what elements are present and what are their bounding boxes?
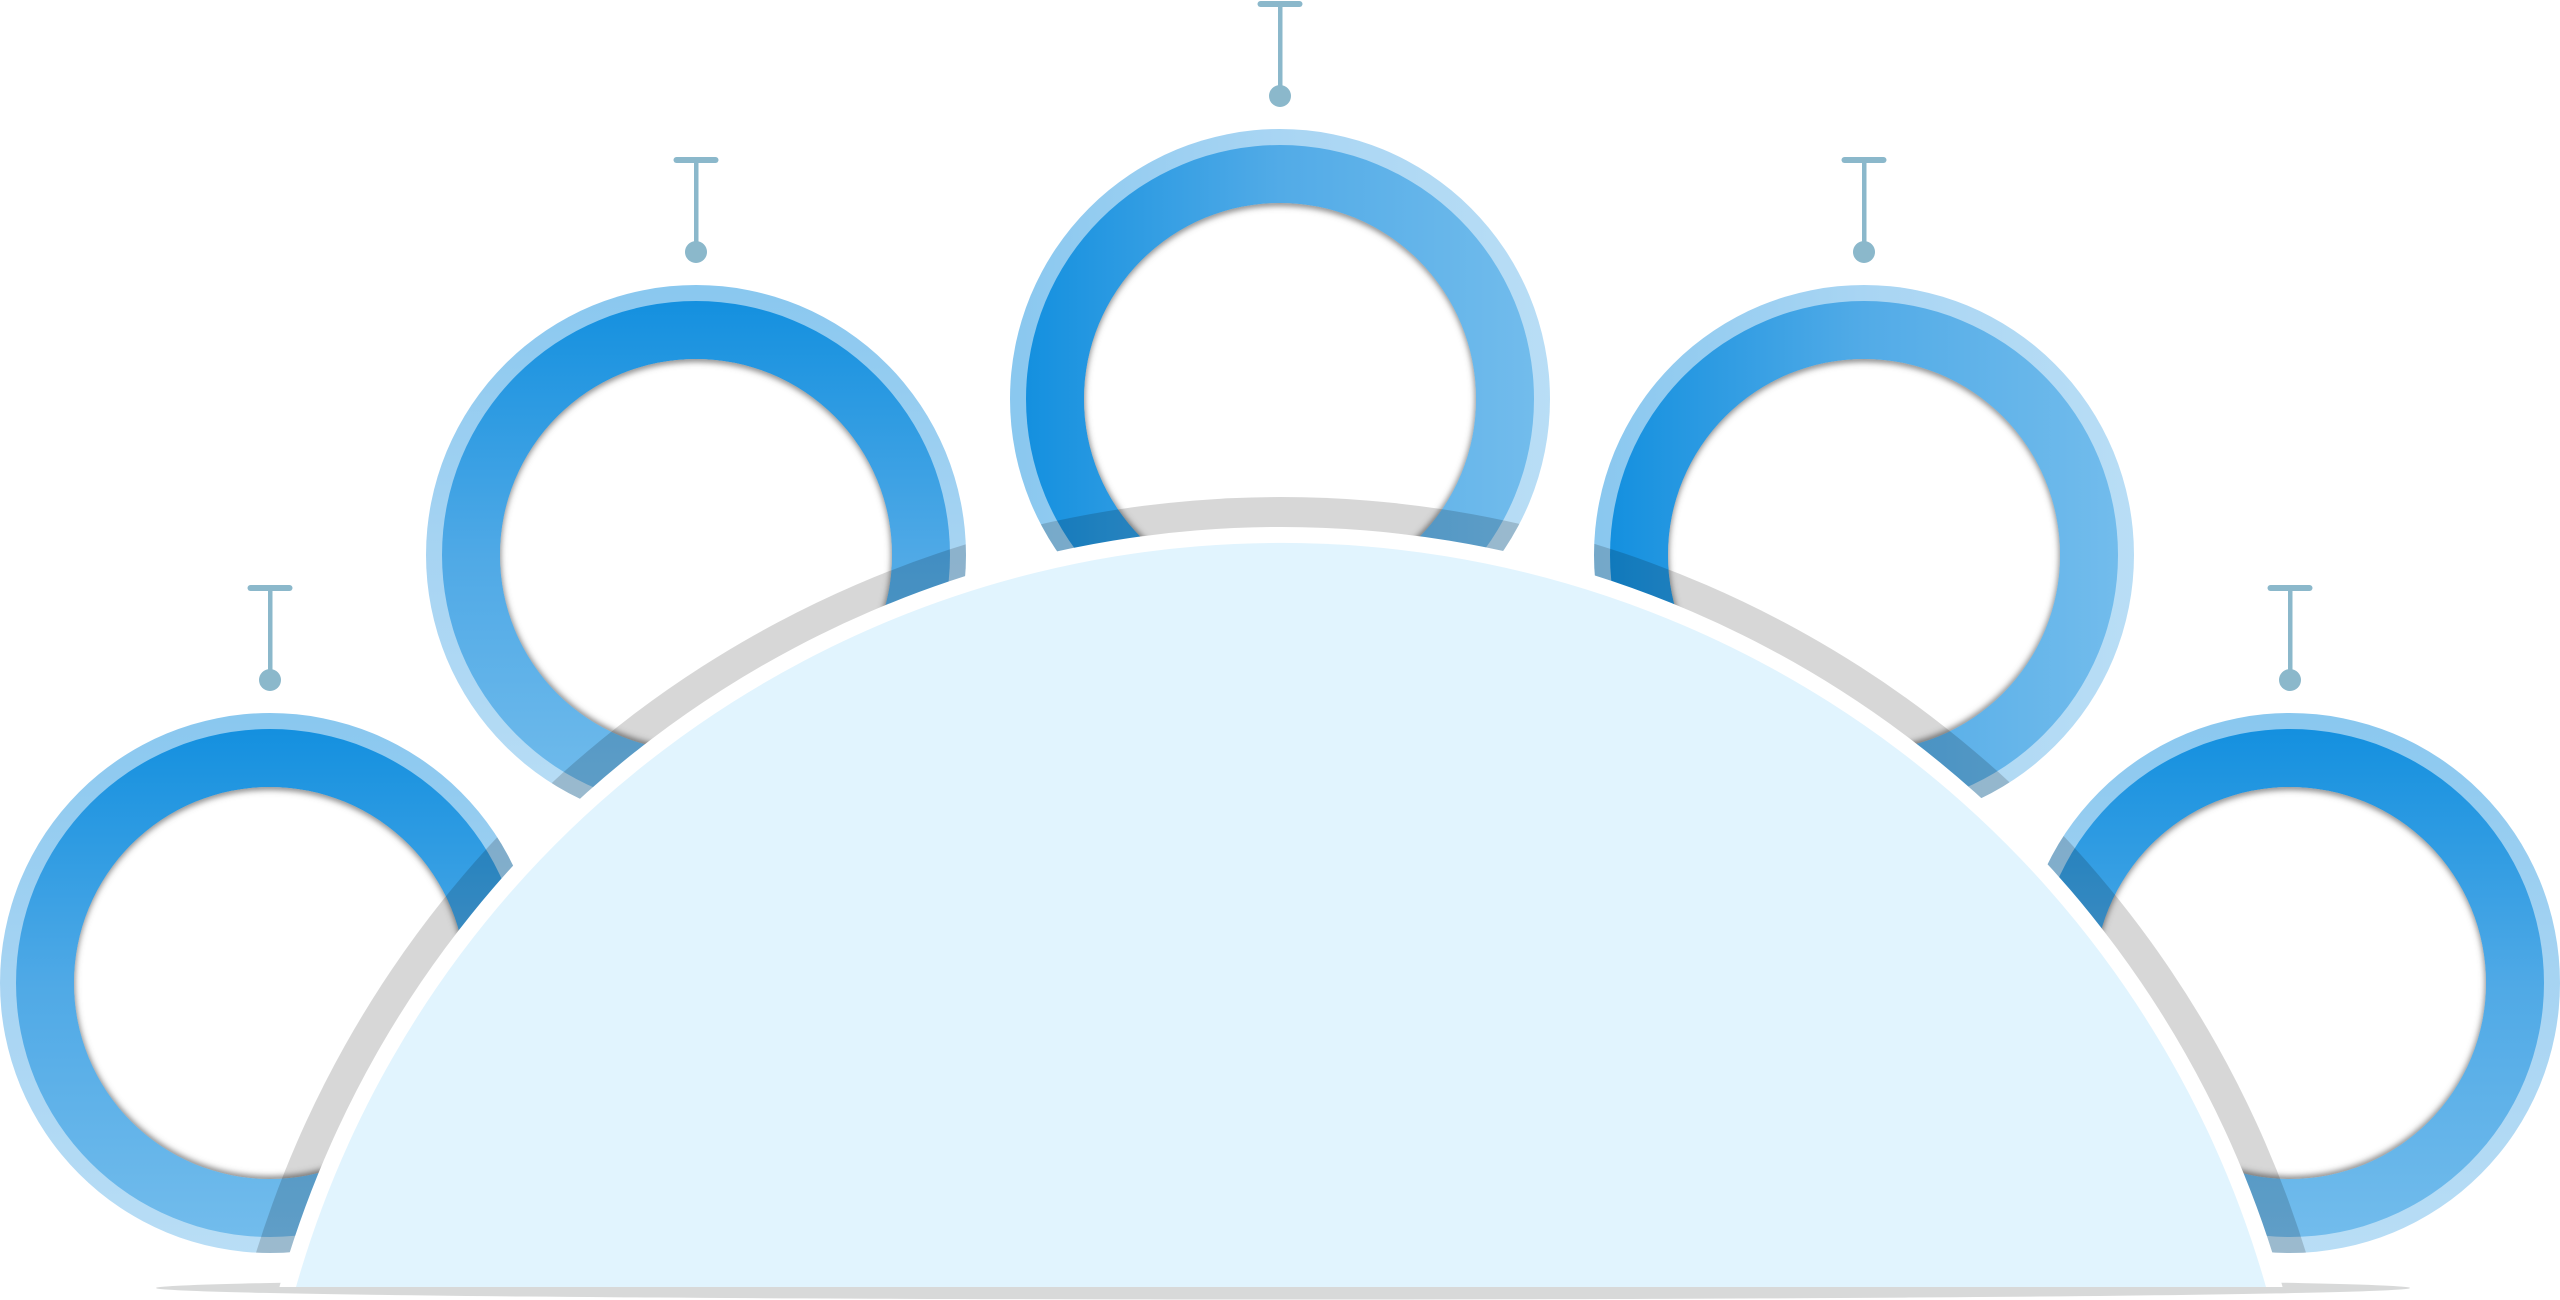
ring 2: upper left (426, 285, 966, 799)
ring 5: lower right (2048, 713, 2560, 1253)
dome: pale blue panel (296, 543, 2266, 1287)
pin: ring 2 (674, 157, 718, 263)
ground shadow ellipse (156, 1276, 2410, 1300)
pin: ring 4 (1842, 157, 1886, 263)
dome: white outline (279, 527, 2283, 1287)
pin: ring 1 (248, 585, 292, 691)
ring 3: top centre (1010, 129, 1550, 552)
ring 1: lower left (0, 713, 513, 1253)
pin: ring 3 (1258, 1, 1302, 107)
pin: ring 5 (2268, 585, 2312, 691)
ring 4: upper right (1594, 285, 2134, 798)
